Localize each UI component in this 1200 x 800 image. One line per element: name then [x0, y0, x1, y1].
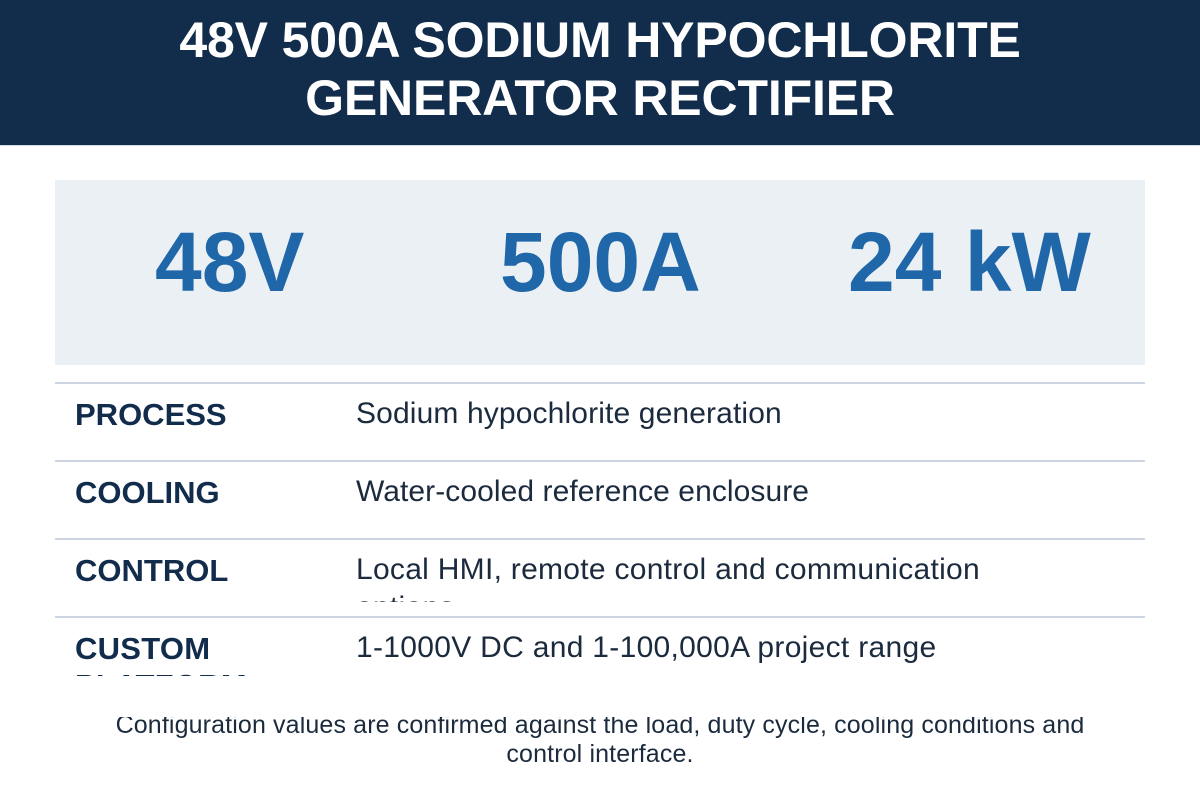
title [179, 12, 1021, 126]
title: 48V 500A SODIUM HYPOCHLORITE [179, 12, 1021, 68]
footnote [116, 717, 1084, 768]
stat: voltage: 48V [155, 215, 304, 309]
label: cooling: COOLING [75, 475, 220, 510]
value: cooling: Water-cooled reference enclosure [356, 475, 809, 508]
title: GENERATOR RECTIFIER [305, 70, 895, 126]
stat: current: 500A [500, 215, 701, 309]
label: process: PROCESS [75, 397, 227, 432]
value: custom platform: 1-1000V DC and 1-100,000A project range [356, 631, 936, 664]
footnote: control interface. [506, 740, 694, 768]
header banner [0, 0, 1200, 146]
row: custom platform [75, 631, 936, 676]
row: process [75, 397, 782, 432]
label: control: CONTROL [75, 553, 228, 588]
panel: key ratings [55, 180, 1145, 365]
stat: power: 24 kW [848, 215, 1091, 309]
value: process: Sodium hypochlorite generation [356, 397, 782, 430]
row: control [75, 553, 980, 602]
row: cooling [75, 475, 809, 510]
